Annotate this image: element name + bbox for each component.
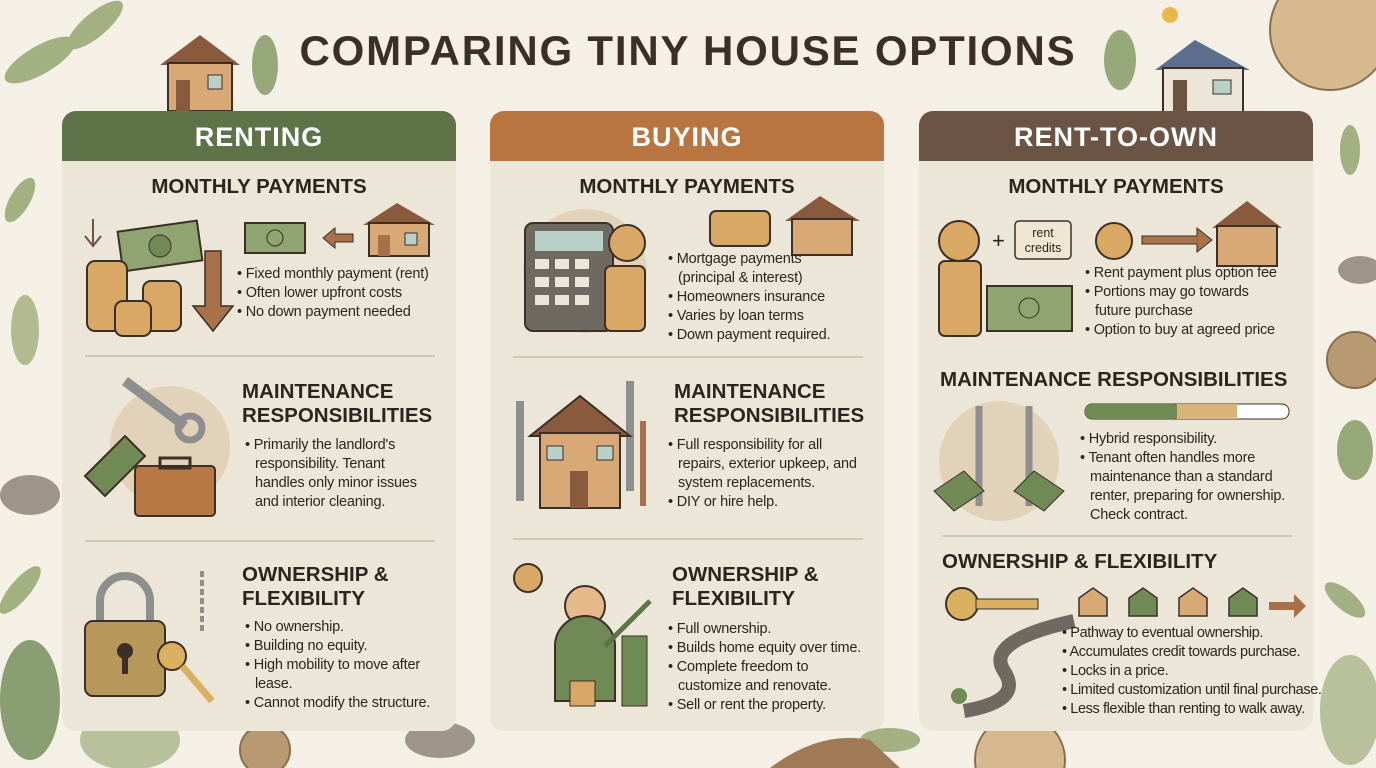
bullets: rto maintenance: • Hybrid responsibility. [1080, 431, 1217, 447]
heading: maintenance: RESPONSIBILITIES [242, 404, 432, 427]
bullets: buying maintenance: repairs, exterior upkeep, and [678, 456, 857, 472]
header: rent-to-own [919, 111, 1313, 161]
icon: wrench toolbox [84, 377, 230, 517]
bullets: rto ownership: • Pathway to eventual ownership. [1062, 625, 1263, 641]
icon: lock and keys [84, 571, 215, 704]
bullets: rto ownership: • Less flexible than renting to walk away. [1062, 701, 1305, 717]
bullets: renting monthly: • Often lower upfront costs [237, 285, 402, 301]
bullets: buying monthly: • Down payment required. [668, 327, 830, 343]
heading: ownership: OWNERSHIP & FLEXIBILITY [942, 550, 1217, 573]
heading: ownership: FLEXIBILITY [672, 587, 795, 610]
bullets: buying maintenance [668, 437, 857, 510]
heading: monthly payments: MONTHLY PAYMENTS [579, 175, 795, 198]
bullets: buying ownership [668, 621, 861, 713]
panel: buying [490, 111, 884, 731]
bullets: renting ownership: • Building no equity. [245, 638, 367, 654]
bullets: rto monthly: • Portions may go towards future purchase [1085, 284, 1249, 319]
icon: bill arrow house [244, 203, 435, 257]
bullets: renting monthly [237, 266, 429, 320]
bullets: renting monthly: • Fixed monthly payment (rent) [237, 266, 429, 282]
heading: ownership [672, 563, 819, 610]
icon: coins plus rent credits: rent [1032, 226, 1054, 240]
heading: maintenance [242, 380, 432, 427]
bullets: buying ownership: • Full ownership. [668, 621, 771, 637]
bullets: rto monthly [1085, 265, 1277, 338]
bullets: buying monthly: • Mortgage payments (principal & interest) [668, 251, 803, 286]
bullets: rto monthly: • Option to buy at agreed price [1085, 322, 1275, 338]
bar: hybrid responsibility [1084, 404, 1290, 420]
panel: renting [62, 111, 456, 731]
bullets: rto ownership: • Locks in a price. [1062, 663, 1168, 679]
bullets: rto ownership [1062, 625, 1322, 717]
bullets: renting maintenance: • Primarily the landlord's responsibility. Tenant handles only minor issues and interior cleaning. [245, 437, 417, 510]
header: buying [490, 111, 884, 161]
bullets: rto ownership: • Limited customization until final purchase. [1062, 682, 1322, 698]
icon: calculator coins [523, 196, 860, 333]
bullets: rto ownership: • Accumulates credit towards purchase. [1062, 644, 1300, 660]
heading: monthly payments: MONTHLY PAYMENTS [1008, 175, 1224, 198]
bullets: renting ownership: • No ownership. [245, 619, 344, 635]
bullets: buying ownership: • Complete freedom to customize and renovate. [668, 659, 831, 694]
bullets: buying ownership: • Sell or rent the property. [668, 697, 826, 713]
heading: monthly payments: MONTHLY PAYMENTS [151, 175, 367, 198]
bullets: buying maintenance: system replacements. [678, 475, 815, 491]
icon: left house [160, 35, 240, 111]
icon: coins plus rent credits: credits [1025, 241, 1061, 255]
heading: maintenance [674, 380, 864, 427]
heading: ownership [242, 563, 389, 610]
icon: coins plus rent credits: + [992, 228, 1005, 253]
bullets: buying ownership: • Builds home equity over time. [668, 640, 861, 656]
bullets: renting ownership [245, 619, 430, 711]
icon: key to houses path [945, 587, 1306, 718]
bullets: buying maintenance: • Full responsibility for all [668, 437, 822, 453]
bullets: buying monthly: • Homeowners insurance [668, 289, 825, 305]
heading: ownership: FLEXIBILITY [242, 587, 365, 610]
title: COMPARING TINY HOUSE OPTIONS [300, 27, 1076, 74]
icon: money and coins [84, 219, 234, 337]
header: renting [62, 111, 456, 161]
heading: maintenance: MAINTENANCE RESPONSIBILITIES [940, 368, 1287, 391]
icon: house with tools [516, 381, 646, 509]
icon: coins plus rent credits [938, 201, 1282, 337]
bullets: rto maintenance: • Tenant often handles more maintenance than a standard renter, preparing for ownership. Check contract. [1080, 450, 1285, 523]
bullets: buying monthly [668, 251, 830, 343]
icon: happy owner with keys [513, 563, 652, 706]
heading: maintenance: RESPONSIBILITIES [674, 404, 864, 427]
header: renting: RENTING [195, 122, 323, 152]
bullets: renting ownership: • High mobility to move after lease. [245, 657, 420, 692]
header: buying: BUYING [631, 122, 742, 152]
icon: hands with tools [933, 401, 1065, 521]
bullets: buying maintenance: • DIY or hire help. [668, 494, 778, 510]
header: rent-to-own: RENT-TO-OWN [1014, 122, 1218, 152]
bullets: renting monthly: • No down payment needed [237, 304, 411, 320]
panel: rent-to-own [919, 111, 1313, 731]
heading: maintenance: MAINTENANCE [242, 380, 393, 403]
heading: maintenance: MAINTENANCE [674, 380, 825, 403]
heading: ownership: OWNERSHIP & [672, 563, 819, 586]
bullets: rto monthly: • Rent payment plus option fee [1085, 265, 1277, 281]
bullets: renting ownership: • Cannot modify the structure. [245, 695, 430, 711]
icon: right house [1155, 7, 1250, 111]
heading: ownership: OWNERSHIP & [242, 563, 389, 586]
bullets: buying monthly: • Varies by loan terms [668, 308, 804, 324]
